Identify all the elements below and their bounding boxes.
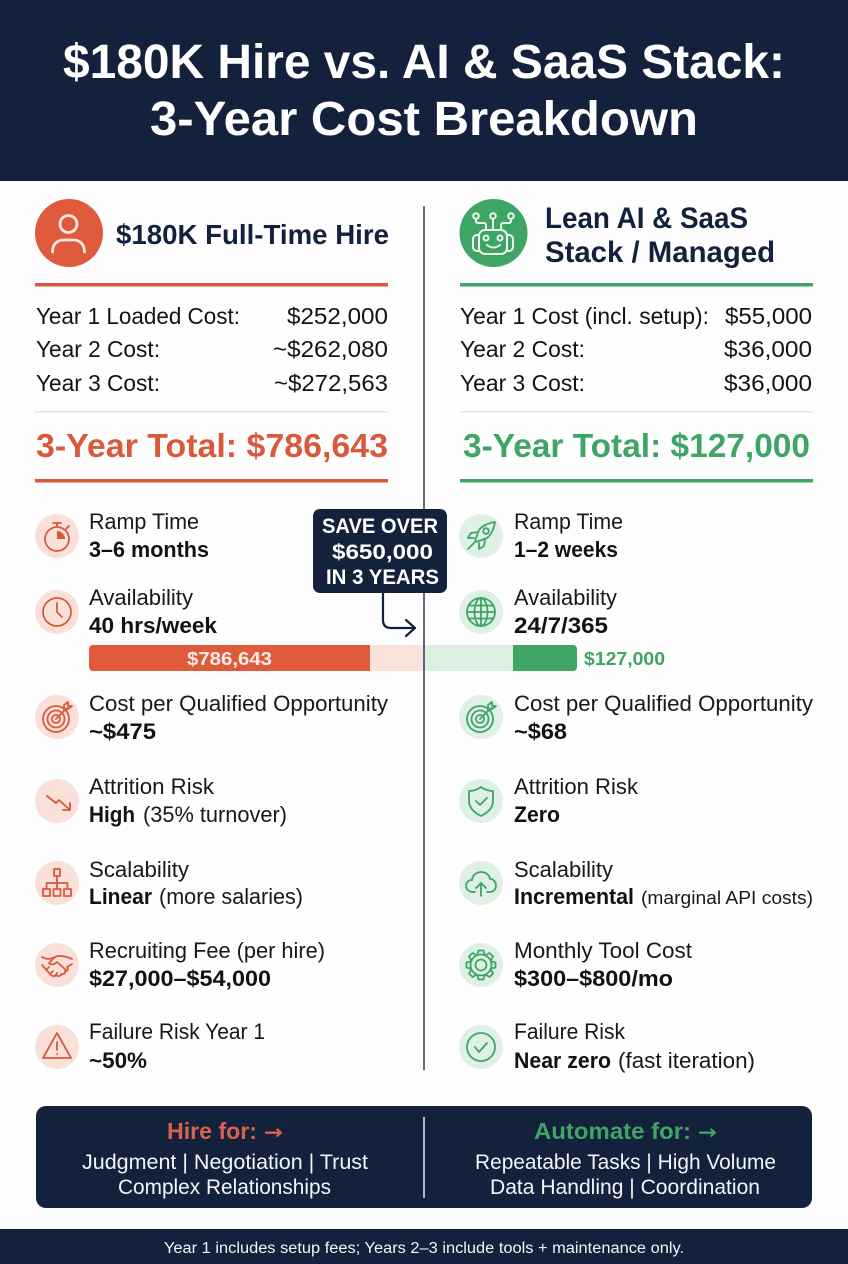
heading: stack: Stack / Managed [545, 236, 775, 269]
metric: ramp time: Ramp Time [514, 509, 623, 534]
metric: attrition risk: (35% turnover) [143, 802, 287, 827]
savings comparison bar: $786,643 [187, 648, 272, 669]
metric: cost per opportunity [35, 691, 388, 744]
callout: savings: SAVE OVER [322, 515, 438, 538]
metric: scalability: Scalability [89, 857, 189, 882]
callout: savings: IN 3 YEARS [326, 566, 439, 589]
metric: attrition risk: Attrition Risk [89, 774, 215, 799]
automate for: → [698, 1120, 717, 1144]
metric: cost per opportunity [459, 691, 813, 744]
yearly costs: stack [460, 303, 812, 396]
metric: ramp time: 1–2 weeks [514, 537, 618, 562]
metric: failure risk [35, 1019, 265, 1073]
title: $180K Hire vs. AI & SaaS Stack: [63, 36, 785, 89]
panel: AI and SaaS stack [459, 199, 813, 1073]
metric: monthly tool cost [459, 938, 692, 991]
metric: availability [35, 585, 217, 638]
yearly costs: stack: Year 2 Cost: [460, 336, 585, 362]
metric: ramp time [35, 509, 209, 562]
yearly costs: hire: Year 3 Cost: [36, 370, 160, 396]
metric: ramp time: Ramp Time [89, 509, 199, 534]
arrow: savings callout to divider [383, 593, 415, 636]
metric: failure risk: (fast iteration) [618, 1048, 755, 1073]
automate for: Repeatable Tasks | High Volume [475, 1151, 776, 1174]
metric: attrition risk [35, 774, 287, 827]
metric: scalability [459, 857, 813, 909]
panel: full-time hire [35, 199, 389, 1073]
metric: failure risk: Failure Risk [514, 1019, 626, 1044]
yearly costs: stack: $36,000 [724, 370, 812, 396]
yearly costs: stack: Year 3 Cost: [460, 370, 585, 396]
metric: scalability: (marginal API costs) [641, 887, 813, 908]
metric: monthly tool cost: $300–$800/mo [514, 966, 673, 991]
metric: availability: Availability [514, 585, 617, 610]
metric: failure risk [459, 1019, 755, 1073]
metric: scalability: Linear [89, 884, 152, 909]
hire for: Judgment | Negotiation | Trust [82, 1151, 368, 1174]
yearly costs: hire: Year 1 Loaded Cost: [36, 303, 240, 329]
yearly costs: stack: $55,000 [725, 303, 812, 329]
metric: failure risk: Near zero [514, 1048, 611, 1073]
icon: robot [460, 199, 528, 267]
center divider [423, 206, 425, 1070]
hire for [82, 1118, 368, 1199]
total: hire: 3-Year Total: $786,643 [36, 427, 388, 464]
footer note: Year 1 includes setup fees; Years 2–3 include tools + maintenance only. [164, 1240, 684, 1257]
yearly costs: hire: Year 2 Cost: [36, 336, 160, 362]
metric: recruiting fee: Recruiting Fee (per hire) [89, 938, 325, 963]
metric: attrition risk [459, 774, 639, 827]
panel: hire for and automate for [36, 1106, 812, 1208]
savings comparison bar: $127,000 [584, 648, 665, 669]
metric: monthly tool cost: Monthly Tool Cost [514, 938, 692, 963]
automate for [475, 1118, 776, 1199]
metric: ramp time [459, 509, 623, 562]
heading: stack: Lean AI & SaaS [545, 202, 748, 235]
metric: recruiting fee: $27,000–$54,000 [89, 966, 271, 991]
yearly costs: hire: ~$272,563 [274, 370, 388, 396]
heading: stack [545, 202, 775, 269]
metric: cost per opportunity: ~$475 [89, 719, 156, 744]
metric: ramp time: 3–6 months [89, 537, 209, 562]
yearly costs: hire: ~$262,080 [273, 336, 388, 362]
header banner [0, 0, 848, 181]
hire for: Complex Relationships [118, 1176, 331, 1199]
yearly costs: hire [36, 303, 388, 396]
yearly costs: hire: $252,000 [287, 303, 388, 329]
title [63, 36, 785, 146]
metric: failure risk: ~50% [89, 1048, 147, 1073]
yearly costs: stack: $36,000 [724, 336, 812, 362]
metric: cost per opportunity: Cost per Qualified Opportunity [514, 691, 813, 716]
callout: savings [313, 509, 447, 593]
metric: availability [459, 585, 617, 638]
icon: person [35, 199, 103, 267]
hire for: → [264, 1120, 283, 1144]
title: 3-Year Cost Breakdown [150, 93, 698, 146]
metric: recruiting fee [35, 938, 325, 991]
metric: attrition risk: High [89, 802, 135, 827]
metric: cost per opportunity: ~$68 [514, 719, 567, 744]
savings comparison bar [89, 645, 665, 671]
metric: scalability: Scalability [514, 857, 613, 882]
yearly costs: stack: Year 1 Cost (incl. setup): [460, 303, 709, 329]
heading: hire: $180K Full-Time Hire [116, 219, 389, 250]
total: stack: 3-Year Total: $127,000 [463, 427, 810, 464]
footer note [0, 1229, 848, 1264]
callout: savings: $650,000 [332, 541, 433, 564]
metric: availability: 40 hrs/week [89, 613, 217, 638]
hire for: Hire for: [167, 1118, 257, 1144]
automate for: Data Handling | Coordination [490, 1176, 760, 1199]
metric: failure risk: Failure Risk Year 1 [89, 1019, 265, 1044]
metric: attrition risk: Zero [514, 802, 560, 827]
metric: scalability: Incremental [514, 884, 634, 909]
metric: scalability [35, 857, 303, 909]
metric: availability: Availability [89, 585, 193, 610]
automate for: Automate for: [534, 1118, 691, 1144]
metric: availability: 24/7/365 [514, 613, 608, 638]
metric: cost per opportunity: Cost per Qualified Opportunity [89, 691, 388, 716]
metric: scalability: (more salaries) [159, 884, 303, 909]
metric: attrition risk: Attrition Risk [514, 774, 639, 799]
